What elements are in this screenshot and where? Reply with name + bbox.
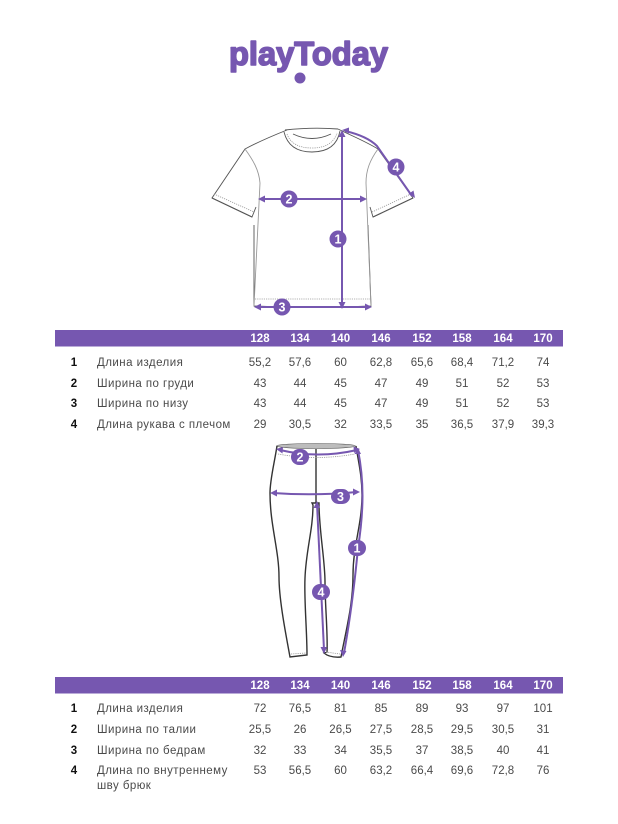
table 1 row 4: 32 bbox=[334, 419, 347, 431]
table 1 row 1: 74 bbox=[537, 357, 550, 369]
table 1 row 3: 44 bbox=[294, 398, 307, 410]
table 1 row 1: 65,6 bbox=[411, 357, 433, 369]
table 1 row 2: 44 bbox=[294, 378, 307, 390]
table 1 header: 134 bbox=[290, 333, 310, 345]
table 2 row 2: Ширина по талии bbox=[97, 724, 196, 736]
arrow 3: hem width: 3 bbox=[279, 300, 286, 314]
table 2 row 4: 53 bbox=[254, 765, 266, 777]
table 1 header: 140 bbox=[331, 333, 350, 345]
table 2 row 4 bbox=[71, 765, 549, 792]
table 1 header bbox=[55, 330, 563, 346]
arrow 3: hem width bbox=[254, 298, 372, 316]
table 2 row 1: 72 bbox=[254, 703, 266, 715]
table 1 row 4: 33,5 bbox=[370, 419, 392, 431]
table 1 row 3 bbox=[71, 398, 549, 410]
table 2 row 3: 40 bbox=[497, 745, 509, 757]
arrow 1: leggings length: 1 bbox=[354, 542, 361, 556]
arrow 2: chest width bbox=[258, 190, 367, 208]
table 1 row 3: 45 bbox=[334, 398, 347, 410]
arrow 1: product length: 1 bbox=[335, 232, 342, 246]
table 1 row 1: 60 bbox=[334, 357, 347, 369]
table 2 row 4: 76 bbox=[537, 765, 549, 777]
arrow 4: inseam length: 4 bbox=[318, 586, 325, 600]
table 2 header bbox=[55, 677, 563, 694]
table 1 row 3: 52 bbox=[497, 398, 509, 410]
table 1 row 1: 55,2 bbox=[249, 357, 271, 369]
table 2 row 1: 93 bbox=[456, 703, 468, 715]
table 1 row 4: 30,5 bbox=[289, 419, 311, 431]
table 1 row 3: 43 bbox=[254, 398, 266, 410]
table 1 header: 146 bbox=[371, 333, 391, 345]
table 2 row 2: 2 bbox=[71, 724, 77, 736]
table 1 row 3: 3 bbox=[71, 398, 77, 410]
table 2 row 2: 25,5 bbox=[249, 724, 271, 736]
arrow 2: waist width bbox=[276, 446, 360, 465]
table 2 header: 152 bbox=[412, 680, 432, 692]
table 2 row 4: 72,8 bbox=[492, 765, 514, 777]
arrow 1: leggings length bbox=[340, 448, 366, 657]
table 2 row 4: шву брюк bbox=[97, 780, 152, 792]
table 2 row 3: 32 bbox=[254, 745, 266, 757]
table 1 row 2: 47 bbox=[375, 378, 387, 390]
table 2 row 3: 33 bbox=[294, 745, 306, 757]
table 2 row 4: Длина по внутреннему bbox=[97, 765, 228, 777]
table 1 header: 170 bbox=[533, 333, 553, 345]
table 2: leggings sizes bbox=[55, 677, 563, 792]
table 1 row 1 bbox=[71, 357, 550, 369]
table 2 row 1: 76,5 bbox=[289, 703, 311, 715]
table 1 row 3: 51 bbox=[456, 398, 468, 410]
table 2 row 3: 34 bbox=[334, 745, 347, 757]
table 2 row 2: 31 bbox=[537, 724, 549, 736]
table 2 row 2: 30,5 bbox=[492, 724, 514, 736]
table 1 row 2 bbox=[71, 378, 549, 390]
table 1 row 2: 49 bbox=[416, 378, 428, 390]
table 1: t-shirt sizes bbox=[55, 330, 563, 431]
table 1 row 2: 45 bbox=[334, 378, 347, 390]
table 2 row 1 bbox=[71, 703, 553, 715]
table 1 row 4 bbox=[71, 419, 554, 431]
table 2 row 4: 60 bbox=[334, 765, 347, 777]
table 2 row 3: Ширина по бедрам bbox=[97, 745, 206, 757]
table 2 row 1: Длина изделия bbox=[97, 703, 183, 715]
table 2 header: 134 bbox=[290, 680, 310, 692]
table 1 row 3: 53 bbox=[537, 398, 549, 410]
table 1 row 1: 71,2 bbox=[492, 357, 514, 369]
table 2 row 3 bbox=[71, 745, 549, 757]
arrow 1: product length bbox=[330, 130, 346, 309]
arrow 2: chest width: 2 bbox=[286, 192, 293, 206]
table 1 row 3: Ширина по низу bbox=[97, 398, 189, 410]
table 1 row 2: 43 bbox=[254, 378, 266, 390]
table 2 row 4: 63,2 bbox=[370, 765, 392, 777]
table 2 row 2 bbox=[71, 724, 549, 736]
table 2 header: 140 bbox=[331, 680, 350, 692]
arrow 2: waist width: 2 bbox=[297, 450, 304, 464]
t-shirt diagram bbox=[212, 128, 415, 316]
table 2 row 1: 101 bbox=[533, 703, 553, 715]
table 1 row 2: 51 bbox=[456, 378, 468, 390]
table 2 row 2: 27,5 bbox=[370, 724, 392, 736]
table 2 row 2: 28,5 bbox=[411, 724, 433, 736]
table 2 row 4: 69,6 bbox=[451, 765, 473, 777]
table 1 row 3: 47 bbox=[375, 398, 387, 410]
table 2 row 1: 89 bbox=[416, 703, 428, 715]
table 2 row 2: 26,5 bbox=[329, 724, 352, 736]
table 1 row 4: 36,5 bbox=[451, 419, 473, 431]
table 1 row 2: Ширина по груди bbox=[97, 378, 194, 390]
table 1 header: 152 bbox=[412, 333, 432, 345]
table 2 row 3: 41 bbox=[537, 745, 549, 757]
leggings outline bbox=[270, 444, 362, 657]
table 2 row 2: 26 bbox=[294, 724, 306, 736]
table 2 row 1: 85 bbox=[375, 703, 387, 715]
table 1 row 1: 62,8 bbox=[370, 357, 392, 369]
table 2 header: 128 bbox=[250, 680, 270, 692]
table 1 row 4: Длина рукава с плечом bbox=[97, 419, 231, 431]
table 2 row 4: 66,4 bbox=[411, 765, 434, 777]
arrow 4: inseam length bbox=[312, 501, 330, 654]
table 2 row 1: 1 bbox=[71, 703, 78, 715]
table 1 header: 164 bbox=[493, 333, 513, 345]
arrow 3: hip width: 3 bbox=[337, 490, 344, 504]
table 1 row 1: 68,4 bbox=[451, 357, 474, 369]
table 1 row 4: 29 bbox=[254, 419, 266, 431]
table 2 header: 164 bbox=[493, 680, 513, 692]
table 1 row 1: Длина изделия bbox=[97, 357, 183, 369]
table 2 row 1: 97 bbox=[497, 703, 509, 715]
logo: playToday: playToday bbox=[229, 35, 389, 72]
table 2 row 4: 4 bbox=[71, 765, 78, 777]
table 1 header: 158 bbox=[452, 333, 472, 345]
table 2 row 3: 3 bbox=[71, 745, 77, 757]
table 2 row 1: 81 bbox=[334, 703, 347, 715]
arrow 3: hip width bbox=[270, 488, 360, 504]
arrow 4: sleeve length: 4 bbox=[393, 160, 400, 174]
table 2 row 2: 29,5 bbox=[451, 724, 473, 736]
table 1 row 2: 52 bbox=[497, 378, 509, 390]
table 1 row 4: 37,9 bbox=[492, 419, 514, 431]
table 2 header: 158 bbox=[452, 680, 472, 692]
table 2 row 3: 38,5 bbox=[451, 745, 473, 757]
t-shirt outline bbox=[212, 128, 413, 308]
table 1 row 4: 39,3 bbox=[532, 419, 554, 431]
table 2 header: 146 bbox=[371, 680, 391, 692]
leggings diagram bbox=[270, 444, 366, 657]
table 1 row 4: 35 bbox=[416, 419, 428, 431]
table 2 header: 170 bbox=[533, 680, 553, 692]
table 1 row 2: 53 bbox=[537, 378, 549, 390]
table 1 row 2: 2 bbox=[71, 378, 77, 390]
table 1 row 4: 4 bbox=[71, 419, 78, 431]
table 1 row 1: 57,6 bbox=[289, 357, 311, 369]
table 2 row 3: 37 bbox=[416, 745, 428, 757]
table 1 header: 128 bbox=[250, 333, 270, 345]
table 2 row 3: 35,5 bbox=[370, 745, 392, 757]
arrow 4: sleeve length bbox=[342, 128, 415, 198]
table 1 row 1: 1 bbox=[71, 357, 78, 369]
table 1 row 3: 49 bbox=[416, 398, 428, 410]
table 2 row 4: 56,5 bbox=[289, 765, 311, 777]
